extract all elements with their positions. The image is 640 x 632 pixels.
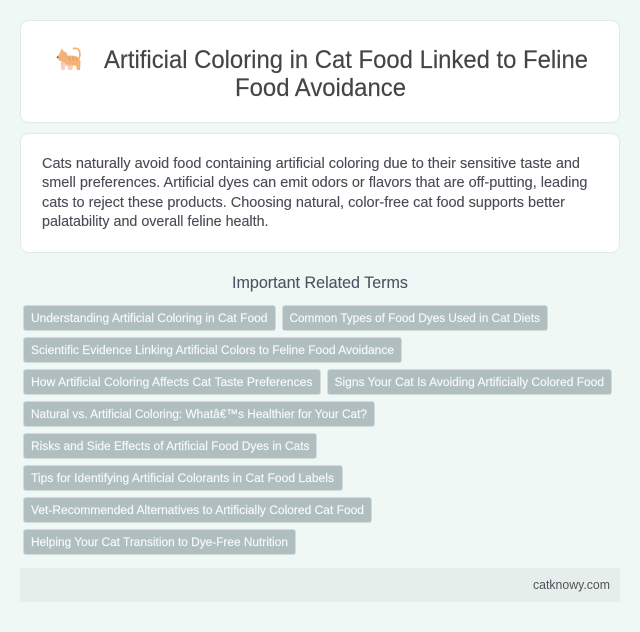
heading: important related terms: Important Related Terms bbox=[232, 274, 408, 292]
tag: understanding artificial coloring bbox=[24, 306, 276, 330]
panel: description card: palatability and overall feline health. bbox=[42, 214, 268, 230]
tag: vet-recommended alternatives: Vet-Recommended Alternatives to Artificially Colored Cat Food bbox=[31, 503, 364, 517]
tag: helping your cat transition bbox=[24, 530, 296, 554]
tag: understanding artificial coloring: Understanding Artificial Coloring in Cat Food bbox=[31, 311, 268, 325]
panel: title card bbox=[20, 20, 620, 122]
panel: description card: cats to reject these products. Choosing natural, color-free cat food supports better bbox=[42, 195, 565, 211]
title text: Food Avoidance bbox=[235, 74, 406, 102]
tag: scientific evidence: Scientific Evidence Linking Artificial Colors to Feline Food Avoidance bbox=[31, 343, 394, 357]
tag: signs your cat is avoiding bbox=[328, 370, 612, 394]
tag: how coloring affects taste: How Artificial Coloring Affects Cat Taste Preferences bbox=[31, 375, 312, 389]
tag: scientific evidence bbox=[24, 338, 402, 362]
panel: description card bbox=[20, 134, 620, 252]
tag: common types of food dyes bbox=[282, 306, 548, 330]
tag: risks and side effects: Risks and Side Effects of Artificial Food Dyes in Cats bbox=[31, 439, 310, 453]
tag: natural vs artificial: Natural vs. Artificial Coloring: Whatâ€™s Healthier for Your Cat? bbox=[31, 407, 367, 421]
tag: how coloring affects taste bbox=[24, 370, 320, 394]
tag: helping your cat transition: Helping Your Cat Transition to Dye-Free Nutrition bbox=[31, 535, 288, 549]
panel: description card: Cats naturally avoid food containing artificial coloring due to their sensitive taste and bbox=[42, 156, 580, 172]
tag: signs your cat is avoiding: Signs Your Cat Is Avoiding Artificially Colored Food bbox=[334, 375, 604, 389]
title text: Artificial Coloring in Cat Food Linked to Feline bbox=[104, 46, 588, 74]
tag: tips for identifying bbox=[24, 466, 342, 490]
tag: common types of food dyes: Common Types of Food Dyes Used in Cat Diets bbox=[290, 311, 540, 325]
panel: description card: smell preferences. Artificial dyes can emit odors or flavors that are off-putting, leading bbox=[42, 175, 588, 191]
footer: catknowy.com bbox=[533, 577, 610, 592]
tag: tips for identifying: Tips for Identifying Artificial Colorants in Cat Food Labels bbox=[31, 471, 334, 485]
tag: vet-recommended alternatives bbox=[24, 498, 372, 522]
icon: cat bbox=[57, 48, 80, 70]
tag: risks and side effects bbox=[24, 434, 316, 458]
tag: natural vs artificial bbox=[24, 402, 374, 426]
title text bbox=[104, 46, 588, 102]
footer bbox=[20, 568, 620, 602]
